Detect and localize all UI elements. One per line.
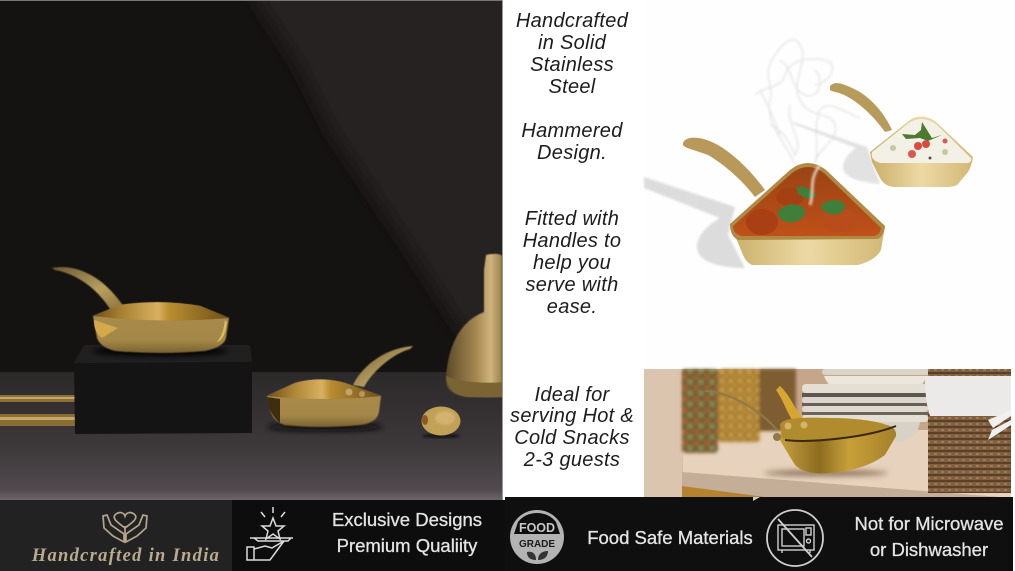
text: not for microwave: or Dishwasher — [870, 539, 988, 560]
icon: large brass pan — [52, 267, 229, 356]
text: ideal for serving: 2-3 guests — [523, 449, 620, 471]
icon: hammered brass pan — [705, 386, 896, 476]
panel: dark studio photo — [0, 0, 502, 500]
icon: woven basket — [925, 369, 1011, 493]
text: exclusive designs: Premium Qualiity — [337, 535, 478, 556]
panel: feature descriptions — [502, 0, 644, 500]
text: food safe materials: Food Safe Materials — [587, 527, 753, 548]
text: solid stainless steel: in Solid — [538, 32, 607, 54]
icon: stacked plates — [802, 369, 930, 442]
icon: no microwave — [767, 510, 823, 566]
text: solid stainless steel: Handcrafted — [516, 10, 629, 32]
text: handles: Fitted with — [525, 208, 619, 230]
panel: pans with curry and raita — [644, 0, 1015, 369]
icon: curry pan — [683, 138, 885, 265]
text: handles: Handles to — [523, 230, 621, 252]
shadows — [644, 122, 880, 268]
text: handles: serve with — [525, 274, 619, 296]
shelf — [682, 430, 1011, 497]
text: solid stainless steel: Stainless — [530, 54, 614, 76]
icon: olive — [422, 406, 460, 438]
icon: food grade badge: GRADE — [519, 539, 555, 550]
icon: hands holding heart — [103, 513, 147, 542]
icon: food grade badge — [510, 510, 564, 564]
icon: food grade badge: FOOD — [519, 521, 555, 535]
panel: kitchen shelf photo — [644, 369, 1011, 497]
text: handles: help you — [533, 252, 611, 274]
icon: star on serving tray — [247, 507, 293, 560]
text: handles: ease. — [547, 296, 597, 318]
text: hammered design: Design. — [537, 142, 607, 164]
text: exclusive designs: Exclusive Designs — [332, 509, 482, 530]
text: ideal for serving: Ideal for — [535, 384, 611, 406]
icon: brass rods — [0, 395, 75, 426]
text: ideal for serving: Cold Snacks — [514, 427, 630, 449]
text: handcrafted in India: Handcrafted in India — [31, 546, 220, 566]
smoke — [755, 40, 860, 165]
panel: bottom feature strip — [0, 497, 1015, 571]
text: ideal for serving: serving Hot & — [510, 405, 634, 427]
text: solid stainless steel: Steel — [548, 76, 596, 98]
icon: pasta jars — [682, 369, 796, 453]
text: not for microwave: Not for Microwave — [854, 513, 1004, 534]
icon: coriander leaves — [778, 187, 845, 222]
text: hammered design: Hammered — [521, 120, 623, 142]
icon: small brass pan — [267, 346, 413, 431]
icon: brass bell vessel — [446, 254, 502, 397]
icon: black display block — [74, 345, 252, 434]
icon: raita pan — [830, 83, 973, 187]
